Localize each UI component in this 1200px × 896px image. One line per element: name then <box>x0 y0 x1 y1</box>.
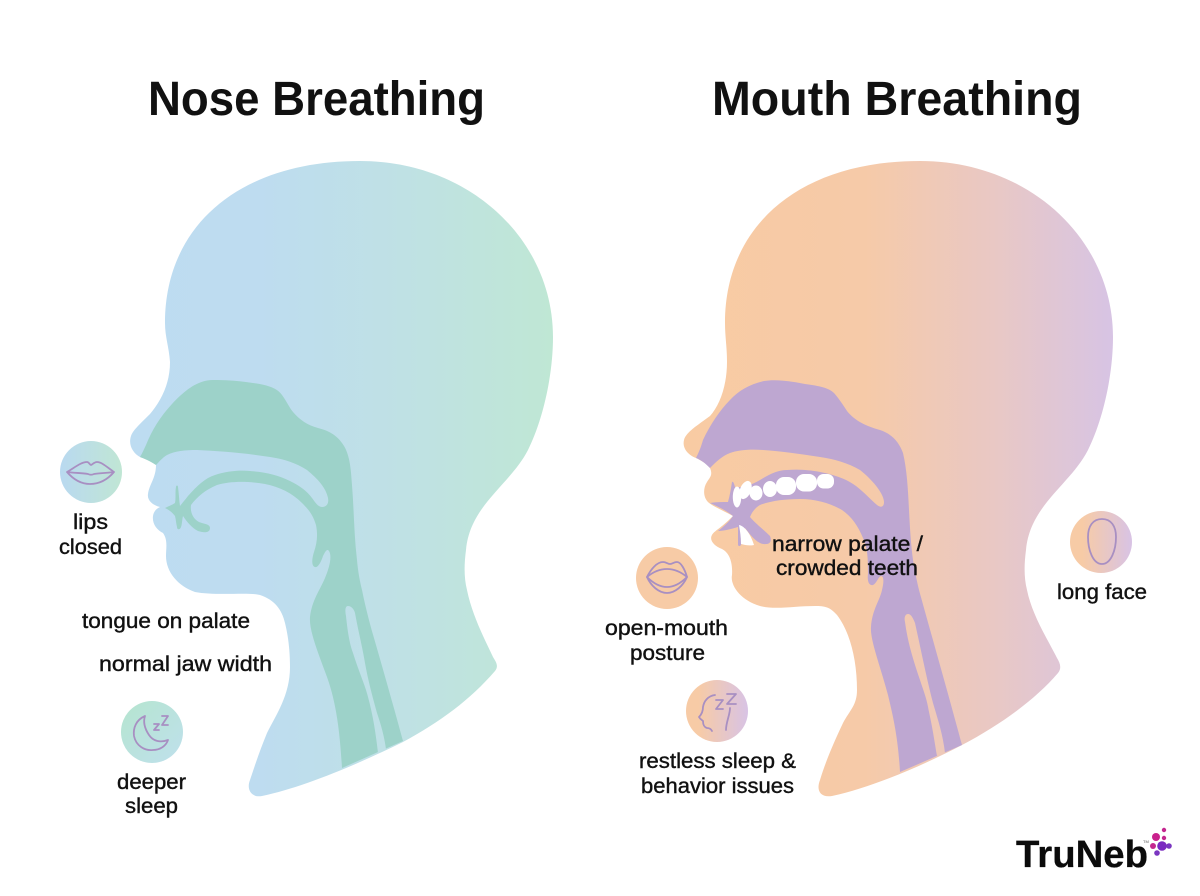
label: restless sleep and behavior issues: behavior issues <box>641 775 794 798</box>
label: deeper sleep <box>117 771 186 818</box>
head silhouette: mouth breathing <box>684 161 1113 796</box>
label: restless sleep and behavior issues <box>639 750 796 798</box>
label: deeper sleep: sleep <box>125 795 178 818</box>
label: normal jaw width: normal jaw width <box>99 653 272 676</box>
airway and tongue: nose breathing <box>140 380 403 768</box>
callout: long face <box>1057 511 1147 604</box>
label: restless sleep and behavior issues: restless sleep & <box>639 750 796 773</box>
label: lips closed: lips <box>73 511 108 534</box>
label: narrow palate / crowded teeth: crowded teeth <box>776 557 918 580</box>
logo: TruNeb: TruNeb <box>1016 834 1148 876</box>
title: Nose Breathing: Nose Breathing <box>148 73 485 126</box>
label: narrow palate / crowded teeth: narrow palate / <box>772 533 923 556</box>
label: deeper sleep: deeper <box>117 771 186 794</box>
airway and tongue: mouth breathing <box>696 380 962 772</box>
logo: TruNeb: TM <box>1143 839 1149 844</box>
airway slit <box>905 614 945 756</box>
icon: moon and zzz <box>121 701 183 763</box>
label: open-mouth posture <box>605 617 728 665</box>
callout: deeper sleep <box>117 701 186 818</box>
title: Mouth Breathing: Mouth Breathing <box>712 73 1082 126</box>
icon: closed lips <box>60 441 122 503</box>
icon: long face outline <box>1070 511 1132 573</box>
airway slit <box>345 606 386 753</box>
label: lips closed <box>59 511 122 559</box>
label: lips closed: closed <box>59 536 122 559</box>
panel: mouth breathing head <box>684 161 1113 796</box>
panel: nose breathing head <box>130 161 553 796</box>
head silhouette: nose breathing <box>130 161 553 796</box>
icon: open mouth <box>636 547 698 609</box>
label: narrow palate / crowded teeth <box>772 533 923 580</box>
label: long face: long face <box>1057 581 1147 604</box>
callout: lips closed <box>59 441 122 559</box>
teeth <box>733 474 834 545</box>
label: tongue on palate: tongue on palate <box>82 610 250 633</box>
icon: head with zzz <box>686 680 748 742</box>
callout: open-mouth posture <box>605 547 728 665</box>
label: open-mouth posture: posture <box>630 642 705 665</box>
label: open-mouth posture: open-mouth <box>605 617 728 640</box>
callout: restless sleep and behavior issues <box>639 680 796 798</box>
